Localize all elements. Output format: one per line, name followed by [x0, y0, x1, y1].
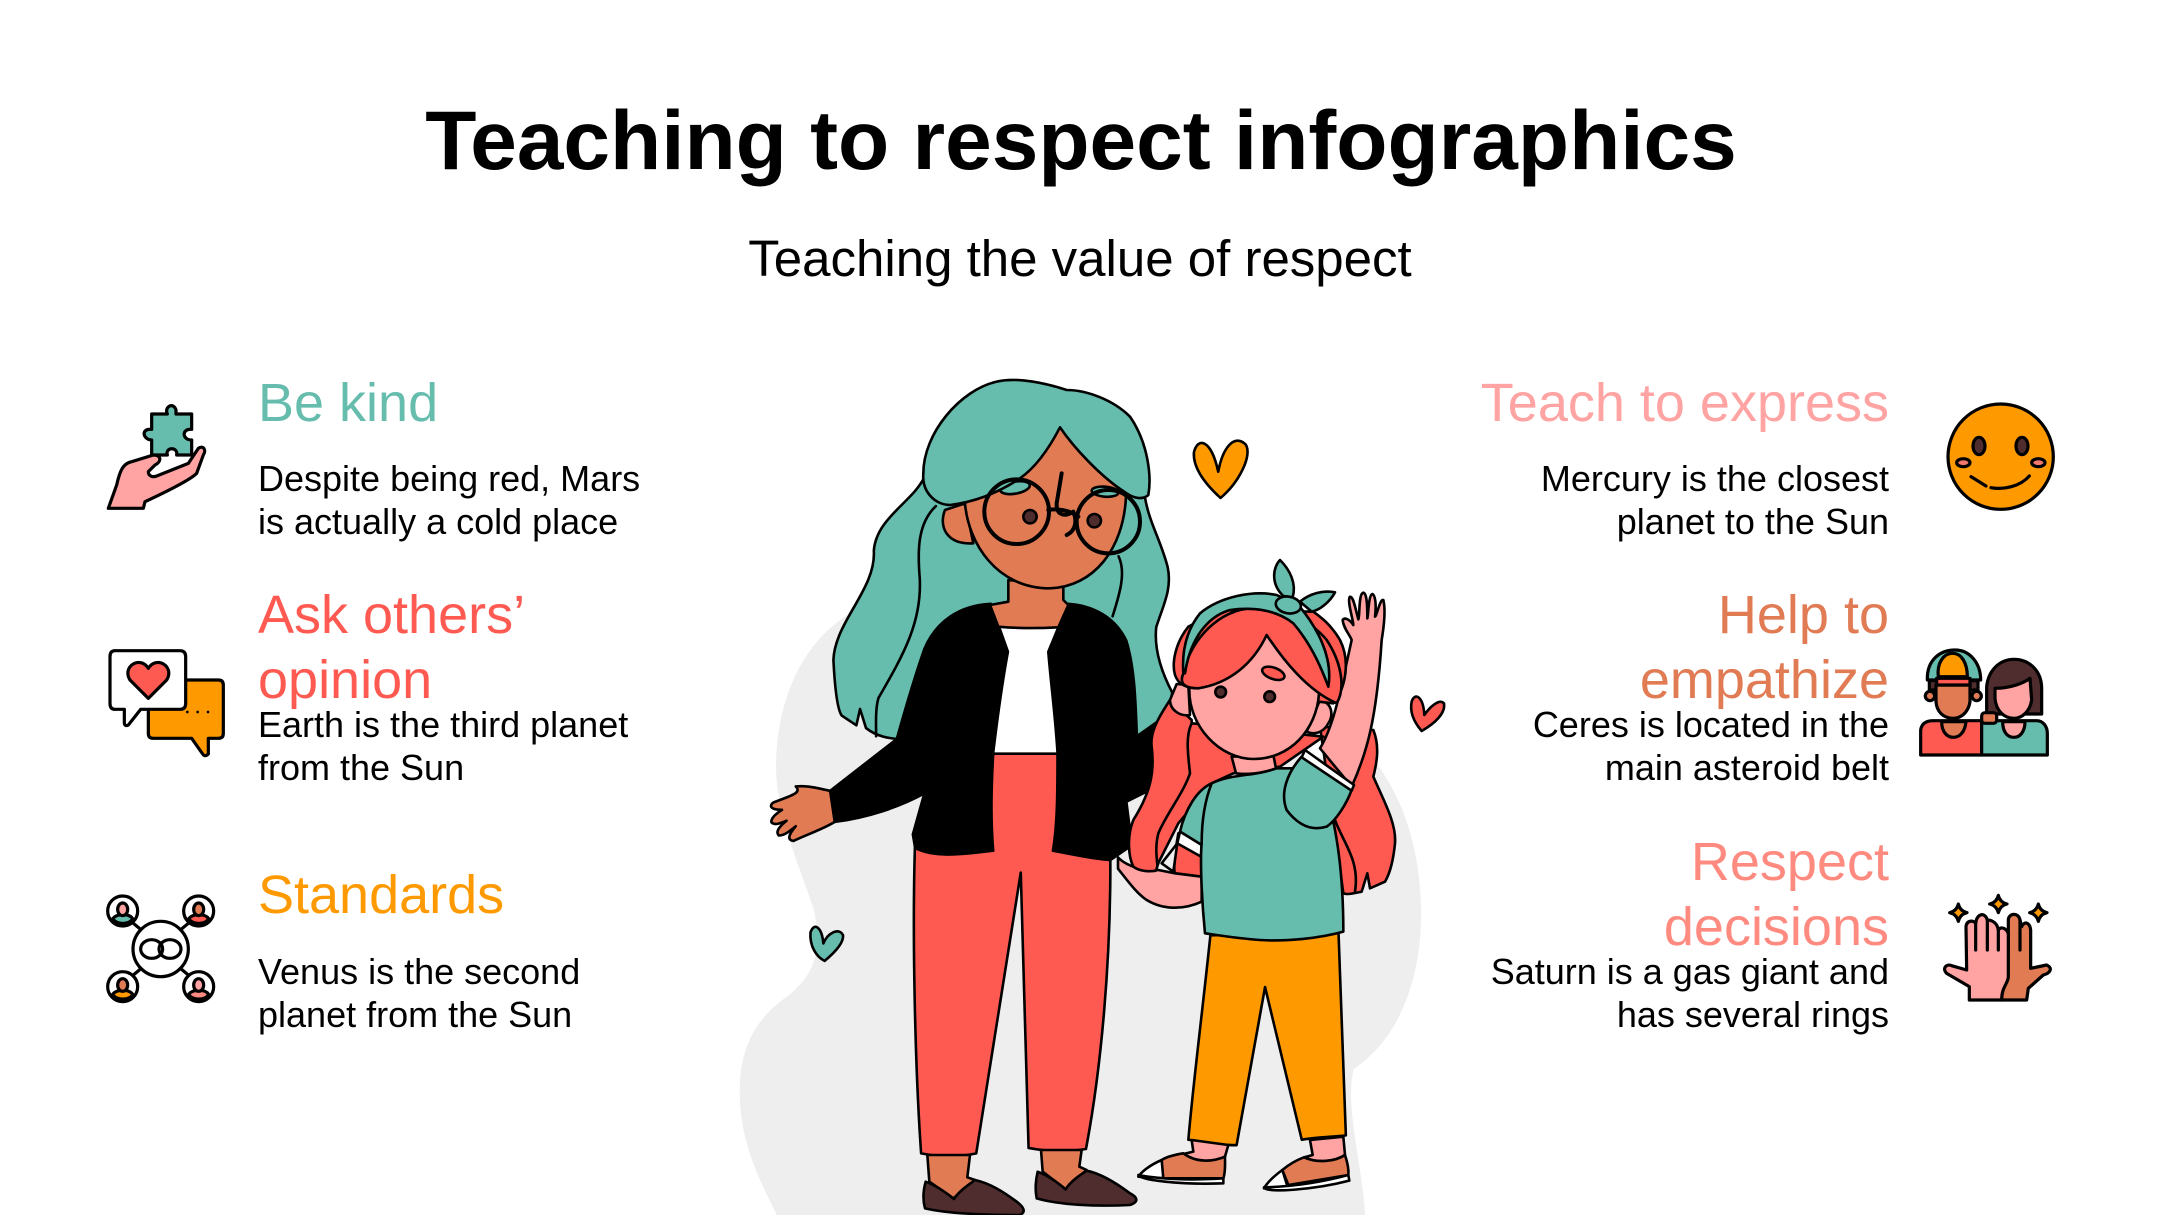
text block: Standards: [258, 865, 580, 1035]
mother body: [771, 477, 1172, 1156]
text block: Respect decisions: Respect: [1691, 832, 1889, 892]
icon: smiling face: [1948, 404, 2053, 509]
icon: two friends: [1921, 650, 2047, 755]
text block: Standards: planet from the Sun: [258, 994, 572, 1035]
text block: Ask others' opinion: Ask others’: [258, 585, 525, 645]
text block: Be kind: Despite being red, Mars: [258, 458, 640, 499]
text block: Ask others' opinion: [258, 585, 628, 788]
daughter head: [1174, 560, 1346, 759]
icon: high five with sparkles: [1945, 895, 2050, 1000]
text block: Teach to express: Mercury is the closest: [1541, 458, 1889, 499]
text block: Respect decisions: has several rings: [1617, 994, 1889, 1035]
title: Teaching to respect infographics: [425, 93, 1737, 187]
icon: hand holding puzzle piece: [108, 406, 205, 508]
text block: Be kind: Be kind: [258, 373, 438, 433]
daughter upper body: [1118, 593, 1395, 940]
text block: Teach to express: [1481, 373, 1889, 542]
text block: Ask others' opinion: Earth is the third planet: [258, 704, 628, 745]
heart: teal: [810, 927, 843, 961]
text block: Teach to express: Teach to express: [1481, 373, 1889, 433]
mother shoes: [924, 1150, 1136, 1215]
daughter legs: [1188, 933, 1346, 1145]
text block: Standards: Venus is the second: [258, 951, 580, 992]
text block: Help to empathize: Ceres is located in the: [1533, 704, 1889, 745]
text block: Be kind: [258, 373, 640, 542]
background blob: [740, 605, 1421, 1215]
illustration: mother and daughter: [740, 380, 1444, 1215]
text block: Help to empathize: main asteroid belt: [1605, 747, 1889, 788]
heart: orange: [1194, 441, 1248, 498]
mother head: [923, 380, 1149, 628]
text block: Respect decisions: Saturn is a gas giant and: [1491, 951, 1889, 992]
text block: Help to empathize: empathize: [1640, 650, 1889, 710]
text block: Be kind: is actually a cold place: [258, 501, 618, 542]
text block: Respect decisions: decisions: [1664, 897, 1889, 957]
text block: Ask others' opinion: from the Sun: [258, 747, 464, 788]
icon: chat bubbles with heart: [110, 651, 223, 756]
subtitle: Teaching the value of respect: [748, 230, 1412, 287]
text block: Standards: Standards: [258, 865, 504, 925]
text block: Ask others' opinion: opinion: [258, 650, 432, 710]
heart: red: [1411, 697, 1444, 731]
text block: Teach to express: planet to the Sun: [1617, 501, 1889, 542]
daughter shoes: [1138, 1137, 1349, 1190]
text block: Respect decisions: [1491, 832, 1889, 1035]
text block: Help to empathize: Help to: [1718, 585, 1889, 645]
daughter figure: [1118, 560, 1395, 1190]
mother figure: [771, 380, 1172, 1215]
text block: Help to empathize: [1533, 585, 1889, 788]
icon: connected people network: [108, 896, 214, 1002]
